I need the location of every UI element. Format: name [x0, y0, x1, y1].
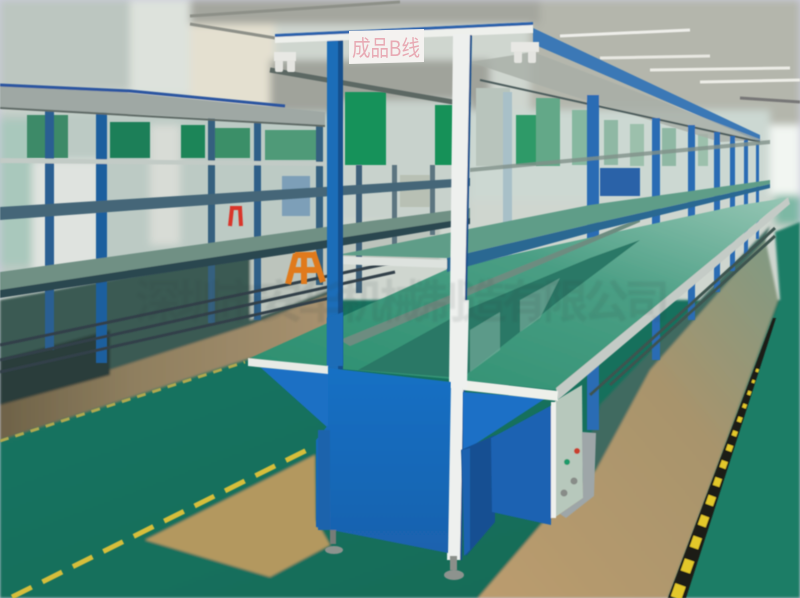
- machine feet: [330, 530, 336, 544]
- cabinet left funnel: [260, 367, 328, 428]
- floor: right green: [668, 222, 800, 598]
- lamp holder right: [511, 42, 539, 63]
- main frame: front edges of deck: [248, 300, 558, 401]
- main line: top rail: [533, 28, 760, 142]
- floor: yellow hazard lines: [0, 318, 776, 598]
- lamp holder left: [274, 52, 296, 72]
- background: walls and ceiling: [0, 0, 800, 330]
- deck centre gap showing floor: [358, 240, 640, 378]
- main line: frame lower rails: [590, 228, 775, 395]
- orange stools: [230, 208, 323, 284]
- main line: rear posts: [503, 92, 759, 430]
- floor: rear reflective area: [0, 240, 330, 405]
- main line: far structure: [270, 28, 775, 430]
- deck right white edge: [556, 197, 790, 400]
- main line: upper shelf: [337, 140, 770, 272]
- sign: finished goods line B: [349, 29, 424, 64]
- bench middle shelf: [0, 178, 470, 220]
- upper shelf second tier: [470, 140, 770, 172]
- main frame: top bar with sign: [274, 22, 539, 560]
- floor: centre tan patch: [145, 455, 330, 577]
- bench work surface: [0, 208, 470, 297]
- ceiling beams: [190, 2, 800, 102]
- watermark: 深圳市安华机械制造有限公司: [135, 276, 670, 328]
- background workbench line: [0, 85, 470, 372]
- frame left post: [327, 40, 343, 370]
- cabinet: blue funnel and front: [260, 367, 596, 580]
- deck left edge: [340, 218, 640, 346]
- cabinet rear box: [491, 405, 552, 525]
- frame top bar: [275, 22, 533, 43]
- electrical control box: [551, 385, 596, 518]
- cabinet front panel: [316, 368, 451, 553]
- main line: lower deck: [250, 197, 790, 400]
- floor: right walkway: [478, 238, 778, 598]
- green window panels: [27, 88, 708, 216]
- cabinet right side: [461, 435, 495, 556]
- cabinet right funnel: [463, 392, 546, 452]
- bench posts: [45, 105, 435, 363]
- bench top shelf: [0, 85, 325, 125]
- sign: finished goods line B: 成品B线: [352, 36, 420, 61]
- floor: base: [0, 215, 800, 598]
- bench lower rails: [0, 262, 395, 372]
- frame centre post: [458, 35, 472, 560]
